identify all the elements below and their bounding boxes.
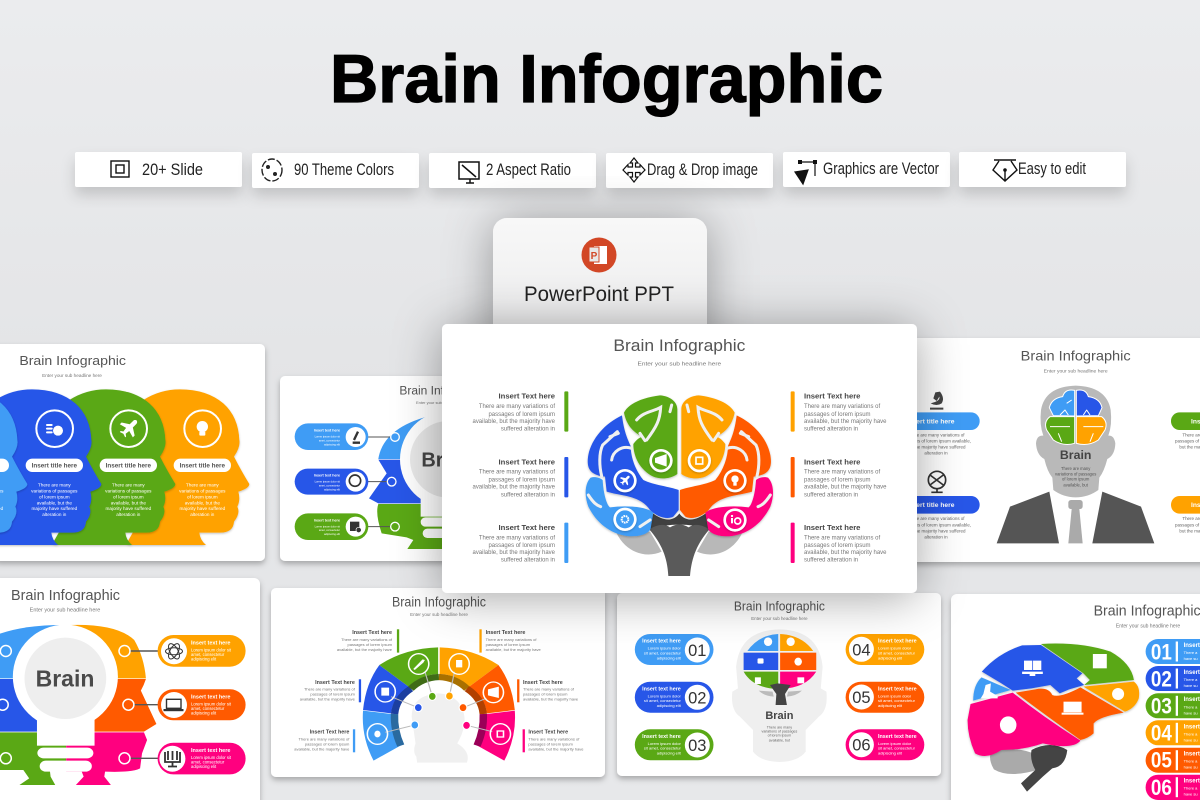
panel: numbered pills slide: of lorem ipsum — [768, 734, 791, 738]
head silhouette — [412, 693, 468, 763]
pill 06: Lorem ipsum dolor — [878, 741, 912, 746]
panel: suit figure slide: There are many — [1061, 466, 1091, 471]
label: top left: Insert Text here — [499, 392, 555, 401]
panel: PowerPoint badge — [493, 218, 707, 358]
lobes — [586, 395, 773, 536]
feature badges row — [75, 152, 1126, 188]
badge: Easy to edit: Easy to edit — [1018, 159, 1086, 178]
pill: pink — [158, 743, 246, 774]
label: top right: passages of lorem ipsum — [486, 642, 531, 647]
label: middle right: Insert Text here — [804, 457, 860, 466]
subheading: Enter your sub headline here — [1044, 369, 1108, 375]
row 01: There a — [1184, 650, 1198, 655]
subheading: Enter your sub headline here — [30, 608, 100, 614]
label: middle right: passages of lorem ipsum — [523, 691, 568, 696]
badge: 20+ Slide — [75, 152, 242, 187]
side brain — [968, 644, 1139, 792]
label: middle left: passages of lorem ipsum — [310, 691, 356, 696]
pill: orange — [158, 635, 246, 667]
label: top left — [472, 391, 568, 433]
label: bottom left — [472, 523, 568, 564]
head segments: Brain — [421, 450, 472, 472]
badge: 20+ Slide: 20+ Slide — [142, 160, 203, 179]
arch diagram — [363, 647, 515, 763]
label: top left — [337, 629, 399, 653]
head: blue — [0, 389, 101, 545]
label: bottom left — [294, 729, 355, 752]
pill 06: adipiscing elit — [878, 751, 903, 756]
pill: green: amet, consectetur — [319, 528, 340, 532]
label: top right: Insert Text here — [804, 392, 860, 401]
panel: numbered pills slide — [617, 593, 941, 776]
label: top right: available, but the majority have — [486, 647, 542, 652]
pill: green: Insert text here — [314, 518, 340, 522]
brain word: Brain — [36, 666, 94, 692]
head: orange: majority have suffered — [179, 506, 226, 511]
head: green — [53, 389, 175, 545]
head: green: Insert title here — [106, 462, 151, 469]
label: top left: available, but the majority have — [472, 419, 556, 425]
icon: plane — [613, 469, 637, 492]
row 03: Insert — [1184, 697, 1200, 703]
panel: numbered pills slide: variations of passages — [762, 730, 797, 734]
pill 02: 02 — [688, 689, 706, 707]
badge: 90 Theme Colors: 90 Theme Colors — [294, 160, 394, 179]
pill 04: adipiscing elit — [878, 655, 903, 660]
pill: red orange: Insert text here — [191, 695, 230, 701]
label: bottom left: Insert Text here — [499, 523, 555, 532]
head: green: variations of passages — [105, 489, 152, 494]
row 02: Insert — [1184, 670, 1200, 676]
label: bottom right: available, but the majority have — [804, 550, 887, 556]
head: blue: majority have suffered — [31, 506, 78, 511]
item: light blue title — [897, 412, 980, 456]
pill 04: Insert text here — [878, 639, 917, 645]
label: top left: available, but the majority have — [337, 647, 393, 652]
pill 04: sit amet, consectetur — [878, 650, 916, 655]
row 02: There a — [1184, 677, 1198, 682]
label: middle left: There are many variations of — [304, 686, 356, 691]
pill: light blue: amet, consectetur — [319, 438, 340, 442]
row 05: have su — [1184, 764, 1198, 770]
pill: blue: adipiscing elit — [324, 487, 340, 491]
center text: Brain — [765, 710, 794, 722]
item: blue title: alteration in — [924, 534, 948, 539]
pill 03: sit amet, consectetur — [644, 746, 681, 751]
head segments — [369, 411, 497, 549]
label: middle left: Insert Text here — [315, 680, 355, 686]
panel: bulb head slide — [280, 376, 497, 561]
row 01: Insert — [1184, 643, 1200, 649]
head: light blue — [0, 389, 27, 545]
head: blue: variations of passages — [31, 489, 78, 494]
head: green: There are many — [112, 483, 145, 488]
head: orange: of lorem ipsum — [187, 494, 218, 499]
pill 01: 01 — [688, 642, 706, 660]
row 01: have su — [1184, 656, 1198, 661]
panel: numbered pills slide: available, but — [769, 738, 790, 742]
label: top left: There are many variations of — [341, 637, 393, 642]
head: blue: Insert title here — [32, 462, 77, 469]
pill 06 — [846, 729, 924, 760]
head: green: alteration in — [116, 512, 141, 517]
subheading: Enter your sub headline here — [637, 362, 721, 368]
pill 01: sit amet, consectetur — [644, 650, 681, 655]
connector lines and rings — [366, 433, 399, 531]
row 06 — [1146, 775, 1200, 800]
subheading: Enter your sub headline here — [42, 373, 102, 378]
row 04: There a — [1184, 732, 1198, 736]
item: light blue title: alteration in — [924, 451, 948, 456]
label: middle left: There are many variations of — [479, 470, 555, 476]
label: PowerPoint PPT — [524, 283, 674, 306]
pill 05: sit amet, consectetur — [878, 698, 916, 703]
row 04: Insert — [1184, 724, 1200, 730]
badge: Drag and Drop image: Drag & Drop image — [647, 160, 758, 179]
pill: green: adipiscing elit — [324, 532, 340, 536]
subheading: Enter your sub headline here — [416, 400, 468, 405]
label: middle left: suffered alteration in — [501, 492, 555, 498]
pill: orange: adipiscing elit — [191, 657, 217, 662]
row 02 — [1146, 666, 1200, 691]
pill 05: Insert text here — [878, 686, 917, 692]
brain illustration — [586, 395, 773, 576]
pill: pink: Insert text here — [191, 748, 230, 754]
heading: Brain Infographic — [613, 337, 745, 355]
row 01 — [1146, 639, 1200, 664]
label: middle right: There are many variations of — [523, 686, 575, 691]
pill 05 — [846, 682, 924, 713]
label: middle right: suffered alteration in — [804, 492, 858, 498]
heading: Brain Infographic — [11, 587, 120, 604]
pill 03: 03 — [688, 737, 706, 755]
subheading: Enter your sub headline here — [751, 616, 808, 621]
heading: Brain Infographic — [1021, 348, 1131, 364]
pill: blue: Insert text here — [314, 474, 340, 478]
head and brain figure — [732, 629, 827, 762]
item: light blue title: Insert title here — [907, 418, 955, 425]
label: middle left — [300, 679, 361, 702]
head: blue: available, but the — [37, 500, 72, 505]
heading: Brain Infographic — [19, 353, 126, 368]
icon: megaphone — [649, 449, 673, 472]
subheading: Enter your sub headline here — [1116, 624, 1180, 630]
item: blue title: There are many variations of — [907, 516, 965, 521]
item: orange title — [1171, 496, 1200, 533]
pill 02: sit amet, consectetur — [644, 698, 681, 703]
pill: blue — [295, 469, 368, 495]
head: blue: of lorem ipsum — [39, 494, 70, 499]
pill: pink: Lorem ipsum dolor sit — [191, 755, 232, 760]
figure: suit and tie — [997, 492, 1154, 543]
pill: blue: Lorem ipsum dolor sit — [315, 480, 340, 484]
row 06: There a — [1184, 786, 1198, 790]
label: top right: suffered alteration in — [804, 427, 858, 433]
title: Brain Infographic — [330, 41, 883, 117]
label: bottom left: There are many variations of — [479, 535, 555, 541]
pill: orange: Lorem ipsum dolor sit — [191, 648, 232, 653]
item: light blue title: but the majority have suffered — [906, 445, 966, 450]
head: green: majority have suffered — [105, 506, 152, 511]
label: bottom right — [523, 729, 584, 752]
pill 01 — [635, 634, 714, 665]
pill: light blue: Insert text here — [314, 429, 340, 433]
pill 01: Lorem ipsum dolor — [648, 646, 681, 651]
label: top left: suffered alteration in — [501, 427, 555, 433]
label: middle right: Insert Text here — [523, 680, 563, 686]
icon: crop — [688, 449, 711, 472]
icon: info — [723, 508, 747, 532]
icon: microscope — [930, 392, 943, 410]
pill: red orange: amet, consectetur — [191, 706, 225, 711]
head: blue: alteration in — [42, 512, 67, 517]
badge: Graphics are Vector: Graphics are Vector — [823, 159, 939, 178]
row 03: have su — [1184, 710, 1198, 716]
label: bottom right: passages of lorem ipsum — [804, 543, 871, 549]
brain icons — [981, 654, 1124, 734]
heading: Brain Infographic — [392, 594, 486, 610]
panel: suit figure slide: available, but — [1063, 482, 1089, 487]
pill 04: Lorem ipsum dolor — [878, 646, 912, 651]
pill: green — [295, 513, 368, 540]
label: bottom left: available, but the majority have — [472, 550, 556, 556]
pill 03 — [635, 729, 714, 760]
pill: green: Lorem ipsum dolor sit — [315, 524, 340, 528]
panel: four-head slide — [0, 344, 265, 561]
label: bottom right: passages of lorem ipsum — [528, 741, 574, 746]
label: top right: Insert Text here — [486, 630, 525, 636]
icon: PowerPoint logo: P — [591, 251, 598, 262]
label: middle left: available, but the majority have — [300, 697, 356, 702]
pill 01: Insert text here — [642, 639, 681, 645]
pill 05: adipiscing elit — [878, 703, 903, 708]
item: blue title: Insert title here — [907, 502, 955, 509]
badge: 2 Aspect Ratio — [429, 153, 596, 188]
label: middle right: available, but the majority have — [804, 485, 887, 491]
icon: gear — [613, 508, 637, 531]
panel: numbered pills slide: There are many — [767, 726, 792, 730]
pill 06: 06 — [852, 737, 871, 755]
row 04: have su — [1184, 738, 1198, 742]
panel: side brain slide — [951, 594, 1200, 800]
figure text: Brain — [1060, 448, 1091, 462]
row 02: 02 — [1151, 666, 1172, 691]
label: bottom right — [791, 523, 887, 564]
heading: Brain Infographic — [399, 383, 490, 397]
item: green title — [1171, 412, 1200, 450]
head: orange: variations of passages — [179, 489, 226, 494]
row 02: have su — [1184, 683, 1198, 688]
panel: bulb head large slide — [0, 578, 260, 800]
pill 02: adipiscing elit — [657, 703, 682, 708]
label: bottom right: There are many variations of — [528, 736, 580, 741]
row 05: There a — [1184, 758, 1198, 764]
badge: 90 Theme Colors — [252, 153, 419, 188]
label: top left: Insert Text here — [352, 630, 392, 636]
label: bottom left: available, but the majority have — [294, 747, 350, 752]
row 03 — [1146, 693, 1200, 718]
connectors and dots — [385, 672, 492, 732]
label: middle left: Insert Text here — [499, 457, 555, 466]
head: orange: There are many — [186, 483, 219, 488]
panel: suit figure slide — [897, 338, 1200, 562]
pill 06: Insert text here — [878, 734, 917, 740]
item: light blue title: There are many variations of — [907, 432, 965, 437]
pill 05: Lorem ipsum dolor — [878, 693, 912, 698]
head: orange: alteration in — [190, 512, 215, 517]
figure: grey head — [1036, 386, 1115, 497]
pill: light blue — [295, 423, 368, 450]
item: blue title: passages of lorem ipsum available, — [901, 522, 971, 527]
row 05: 05 — [1151, 747, 1172, 772]
row 03: There a — [1184, 704, 1198, 710]
panel: suit figure slide: of lorem ipsum — [1062, 477, 1090, 482]
label: top right: There are many variations of — [486, 637, 537, 642]
label: middle left: available, but the majority have — [472, 485, 556, 491]
head and bulb — [0, 625, 156, 785]
icon: light bulb — [723, 469, 747, 492]
label: top right: There are many variations of — [804, 404, 881, 410]
label: top right — [791, 391, 887, 433]
icon rings — [367, 654, 511, 744]
row 05: Insert — [1184, 752, 1200, 758]
label: bottom right: suffered alteration in — [804, 558, 858, 564]
panel: suit figure slide: variations of passages — [1055, 471, 1096, 476]
pill: orange: amet, consectetur — [191, 652, 225, 657]
pill 05: 05 — [852, 689, 871, 707]
pill: light blue: adipiscing elit — [324, 442, 340, 446]
label: bottom left: Insert Text here — [310, 730, 349, 736]
panel: arch slide — [271, 588, 605, 777]
pill 03: adipiscing elit — [657, 751, 682, 756]
panel: main brain slide — [442, 324, 917, 593]
label: top left: There are many variations of — [479, 404, 555, 410]
row 04 — [1146, 720, 1200, 746]
head: orange — [127, 389, 249, 545]
label: bottom right: Insert Text here — [804, 523, 860, 532]
pill: orange: Insert text here — [191, 641, 230, 647]
label: bottom right: There are many variations of — [804, 535, 881, 541]
pill: red orange: adipiscing elit — [191, 711, 217, 716]
pill: red orange — [158, 689, 246, 720]
icon: PowerPoint logo — [582, 238, 616, 272]
pill 04: 04 — [852, 641, 871, 659]
icon: globe — [928, 471, 946, 492]
pill 02: Insert text here — [642, 686, 681, 692]
row 06: 06 — [1151, 775, 1172, 800]
label: top right: available, but the majority have — [804, 419, 887, 425]
arch segments — [363, 647, 515, 761]
pill 04 — [846, 634, 924, 665]
label: bottom left: passages of lorem ipsum — [488, 543, 555, 549]
heading: Brain Infographic — [734, 598, 825, 614]
badge: Graphics are Vector — [783, 152, 950, 187]
head: orange: Insert title here — [180, 462, 225, 469]
subheading: Enter your sub headline here — [410, 612, 468, 617]
pill 03: Lorem ipsum dolor — [648, 741, 681, 746]
label: bottom left: suffered alteration in — [501, 558, 555, 564]
row 01: 01 — [1151, 639, 1172, 664]
head: orange: available, but the — [185, 500, 220, 505]
item: light blue title: passages of lorem ipsum available, — [901, 439, 971, 444]
item: blue title — [897, 496, 980, 539]
label: middle right: passages of lorem ipsum — [804, 478, 871, 484]
pill: pink: amet, consectetur — [191, 759, 225, 764]
label: middle right — [517, 679, 579, 702]
badge: 2 Aspect Ratio: 2 Aspect Ratio — [486, 160, 571, 179]
pill: light blue: Lorem ipsum dolor sit — [315, 434, 340, 438]
cerebellum and stem — [617, 513, 742, 576]
label: top right: passages of lorem ipsum — [804, 412, 871, 418]
label: middle left — [472, 457, 568, 498]
head: green: available, but the — [111, 500, 146, 505]
number rows — [1146, 639, 1200, 800]
row 06: Insert — [1184, 778, 1200, 784]
item: blue title: but the majority have suffered — [906, 528, 966, 533]
pill 02: Lorem ipsum dolor — [648, 693, 681, 698]
row 05 — [1146, 747, 1200, 773]
row 04: 04 — [1151, 721, 1173, 746]
label: top left: passages of lorem ipsum — [488, 412, 555, 418]
label: bottom left: There are many variations of — [298, 736, 350, 741]
label: bottom right: available, but the majority have — [528, 747, 584, 752]
figure: brain quadrants — [1046, 390, 1106, 444]
row 06: have su — [1184, 792, 1198, 796]
pill 06: sit amet, consectetur — [878, 746, 916, 751]
label: middle right: There are many variations of — [804, 470, 881, 476]
label: top left: passages of lorem ipsum — [348, 642, 393, 647]
label: middle left: passages of lorem ipsum — [488, 478, 555, 484]
label: top right — [479, 629, 542, 653]
badge: Drag and Drop image — [606, 153, 773, 188]
label: middle right — [791, 457, 887, 498]
head: green: of lorem ipsum — [113, 494, 144, 499]
pill: red orange: Lorem ipsum dolor sit — [191, 702, 232, 707]
pill: pink: adipiscing elit — [191, 764, 217, 769]
label: bottom right: Insert Text here — [528, 730, 568, 736]
pill 02 — [635, 682, 714, 713]
row 03: 03 — [1151, 693, 1172, 718]
connector lines and rings — [0, 646, 160, 764]
head: blue: There are many — [38, 483, 71, 488]
label: middle right: available, but the majority have — [523, 697, 579, 702]
pill: blue: amet, consectetur — [319, 483, 340, 487]
badge: Easy to edit — [959, 152, 1126, 187]
label: bottom left: passages of lorem ipsum — [305, 741, 350, 746]
pill 03: Insert text here — [642, 734, 681, 740]
pill 01: adipiscing elit — [657, 655, 682, 660]
veins — [588, 405, 770, 527]
